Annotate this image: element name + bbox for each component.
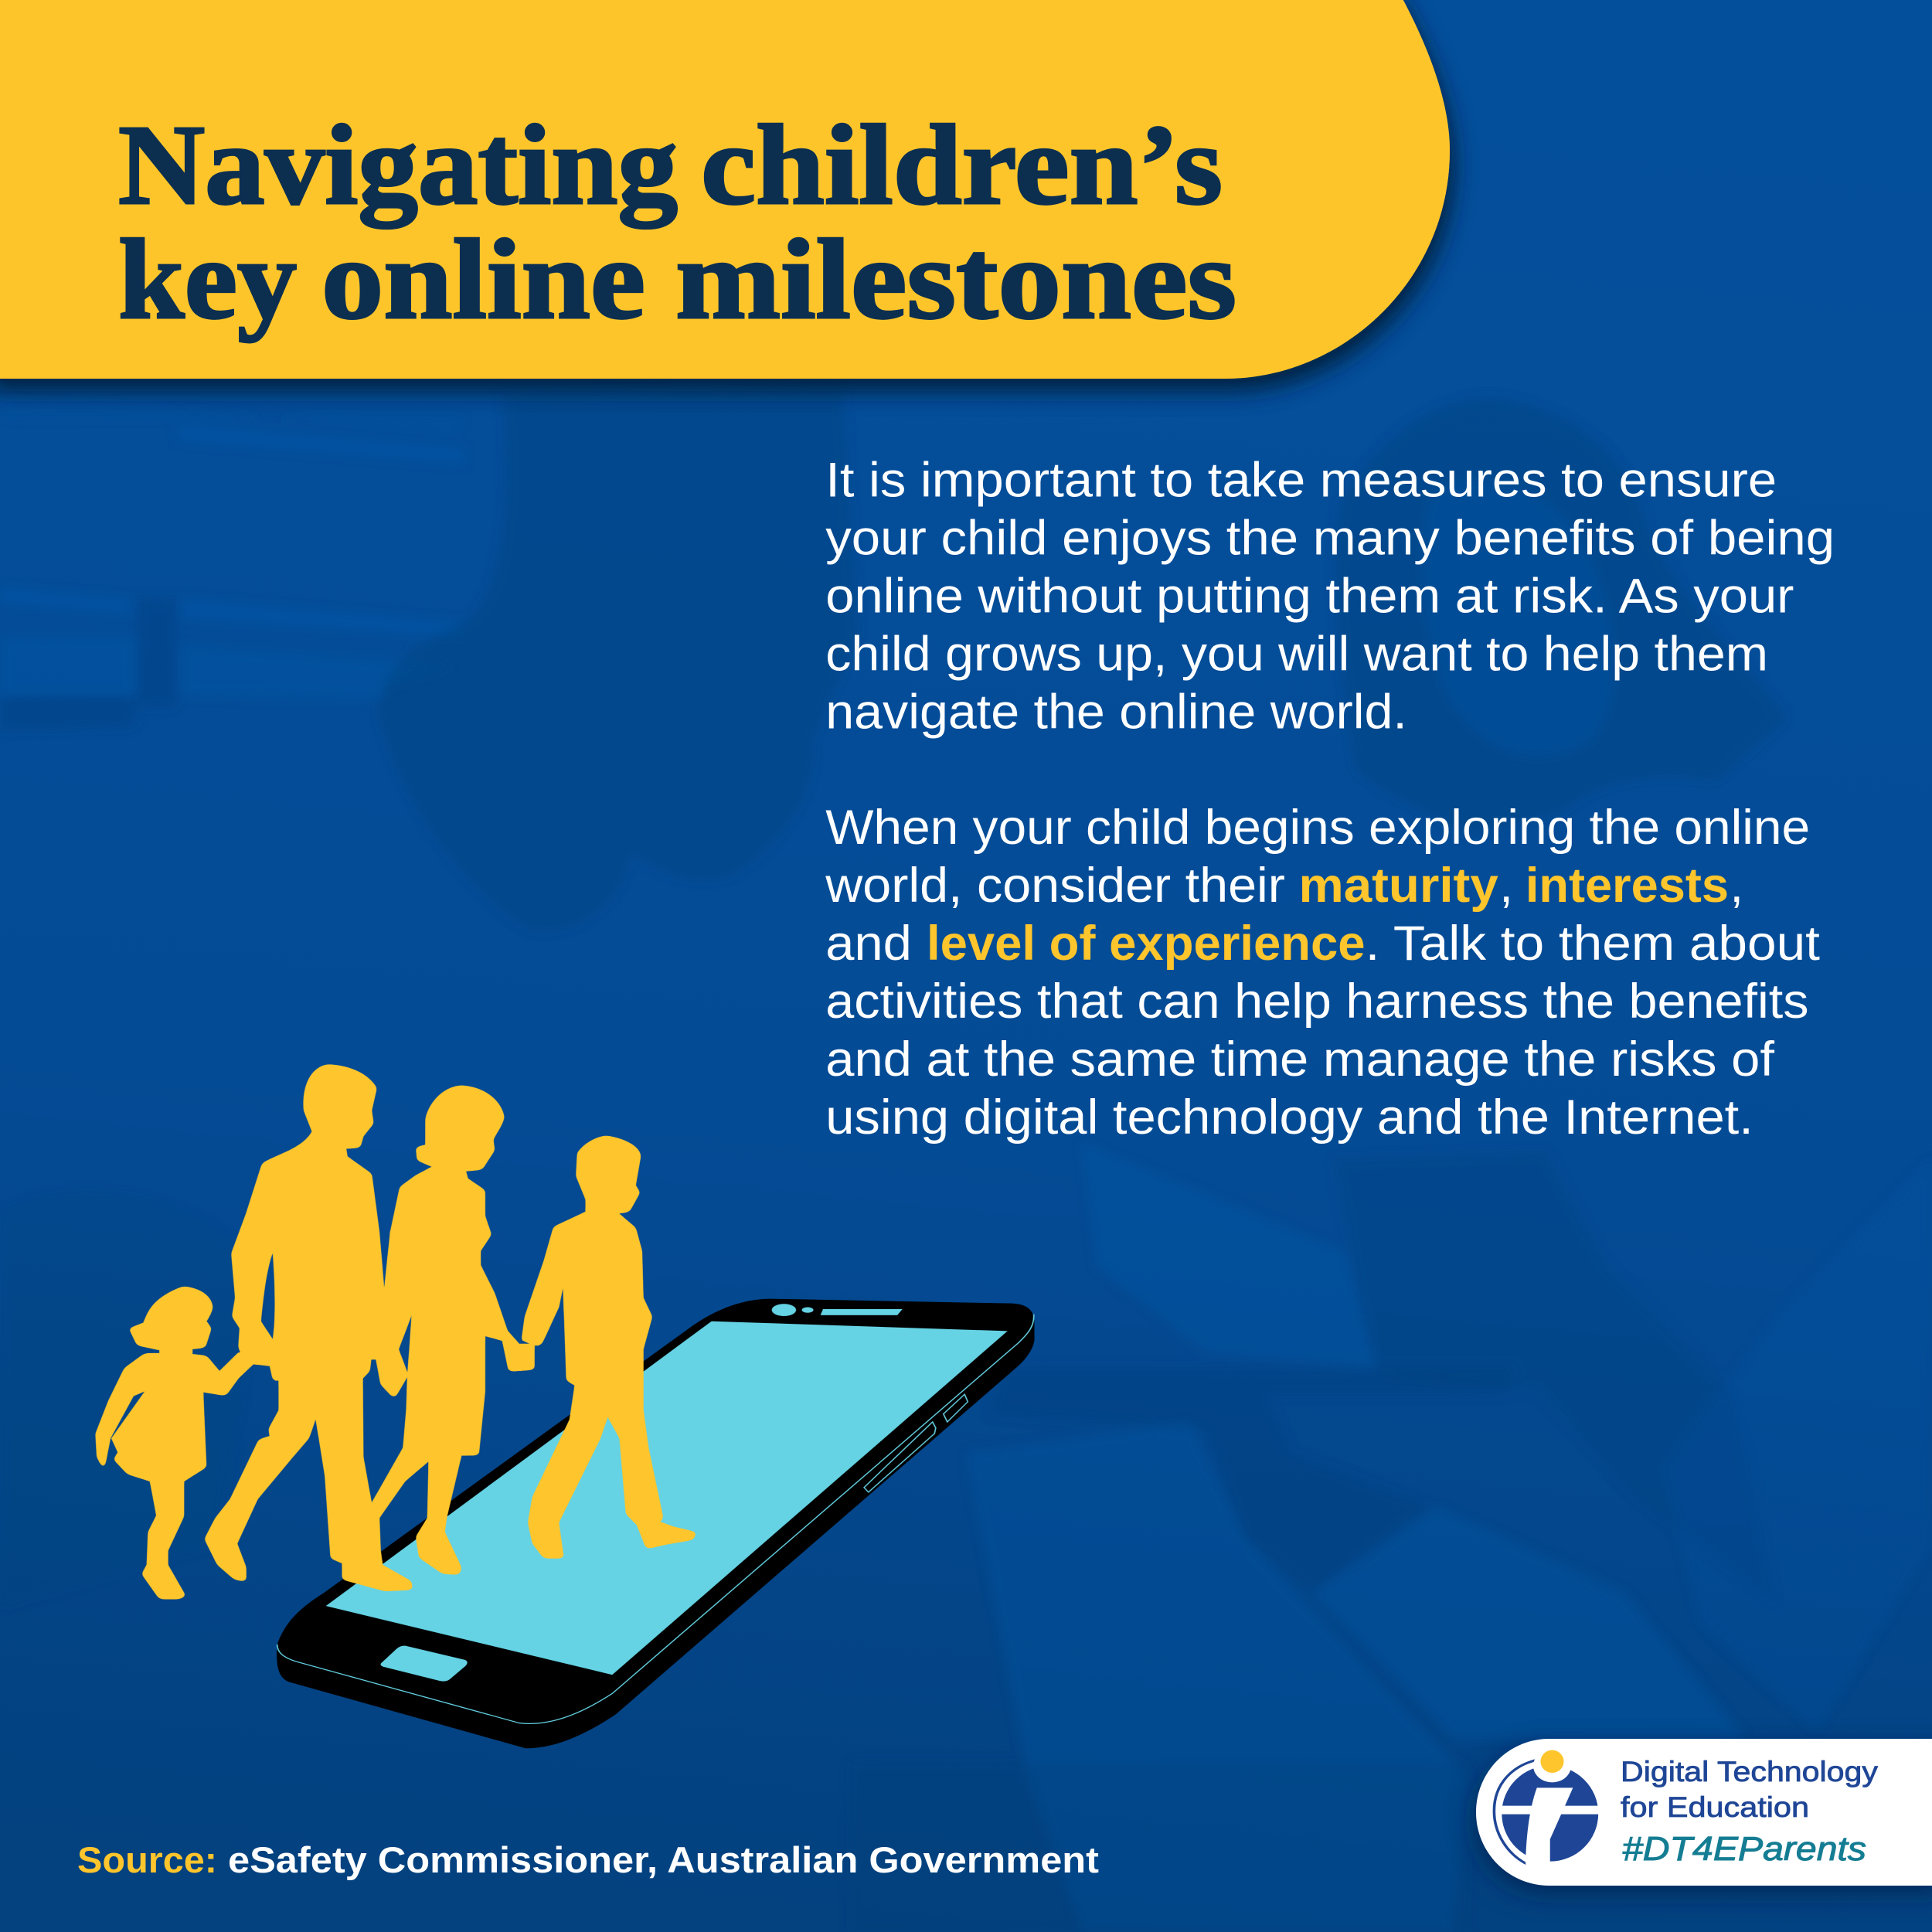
paragraph 2: interests — [1526, 859, 1729, 913]
title: key — [118, 216, 297, 343]
body text — [825, 454, 1835, 1145]
figure: mother — [366, 1085, 535, 1575]
paragraph 2: When your child begins exploring the online — [825, 801, 1810, 855]
paragraph 2: and at the same time manage the risks of — [825, 1032, 1774, 1087]
paragraph 1: It is important to take measures to ensure — [825, 454, 1777, 508]
logo text: for Education — [1621, 1791, 1809, 1823]
title: children’s — [701, 102, 1223, 229]
paragraph 1: online without putting them at risk. As your — [825, 569, 1794, 623]
banner shape — [0, 0, 1450, 379]
paragraph 1: your child enjoys the many benefits of being — [825, 511, 1835, 565]
title: milestones — [675, 216, 1236, 343]
title banner — [0, 0, 1450, 379]
logo text — [1621, 1756, 1879, 1868]
badge background — [1476, 1739, 1932, 1886]
figure: father — [204, 1064, 413, 1591]
paragraph 2: level of experience — [927, 917, 1366, 971]
paragraph 2: using digital technology and the Internet. — [825, 1090, 1753, 1145]
paragraph 1: child grows up, you will want to help them — [825, 627, 1768, 681]
figure: boy — [521, 1135, 697, 1559]
illustration: family walking on smartphone — [95, 1064, 1035, 1748]
paragraph 2: maturity — [1298, 859, 1498, 913]
paragraph 2: world, consider their — [825, 859, 1285, 913]
title — [118, 102, 1236, 343]
logo text: Digital Technology — [1621, 1756, 1879, 1787]
source line: Source: — [77, 1839, 217, 1880]
title: online — [321, 216, 645, 343]
figure: girl — [95, 1286, 274, 1600]
title: Navigating — [118, 102, 678, 229]
paragraph 2 — [825, 801, 1820, 1145]
paragraph 2: , — [1730, 859, 1743, 913]
source line: eSafety Commissioner, Australian Government — [228, 1839, 1099, 1880]
paragraph 2: and — [825, 917, 912, 971]
paragraph 2: activities that can help harness the benefits — [825, 975, 1809, 1029]
paragraph 1 — [825, 454, 1835, 739]
icon: smartphone — [277, 1299, 1035, 1748]
paragraph 1: navigate the online world. — [825, 685, 1407, 739]
paragraph 2: . Talk to them about — [1366, 917, 1820, 971]
logo text: #DT4EParents — [1622, 1830, 1866, 1868]
icon: DT4E logo — [1494, 1750, 1600, 1868]
figures: family silhouette — [95, 1064, 697, 1600]
logo badge — [1476, 1739, 1932, 1886]
paragraph 2: , — [1499, 859, 1513, 913]
